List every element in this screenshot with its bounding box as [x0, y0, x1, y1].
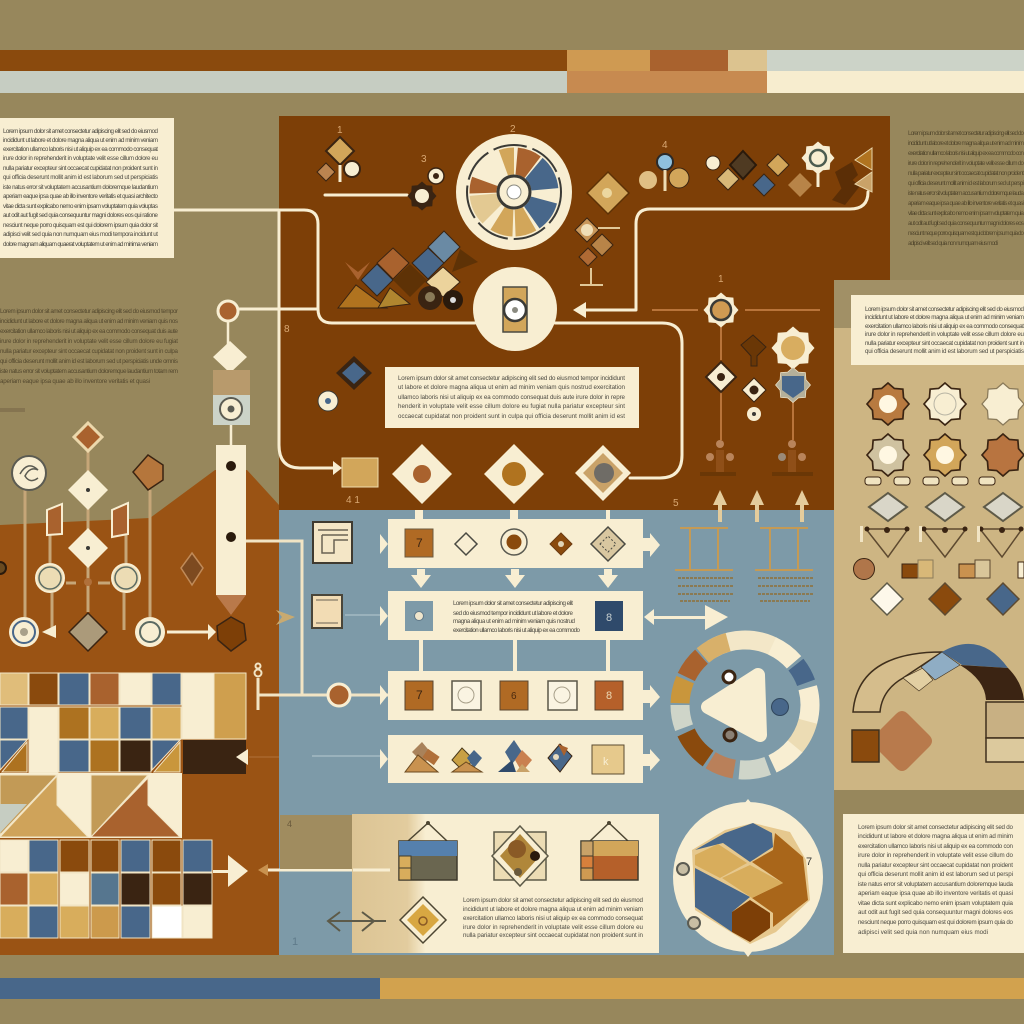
icon group: row of tiles: [706, 151, 812, 197]
icon: corner triangles: [832, 148, 872, 205]
text block: top right: qui officia deserunt mollit anim id est laborum sed ut perspi: [908, 180, 1024, 187]
icon: centre circle card: [473, 267, 557, 351]
icon: gold star: [772, 326, 814, 370]
chart: hexagon emblem: [673, 799, 823, 957]
row two: [388, 591, 643, 640]
text block: lower centre: [463, 897, 644, 939]
chart: arch diagram: [852, 644, 1024, 771]
text block: top right: Lorem ipsum dolor sit amet consectetur adipiscing elit sed do: [908, 130, 1024, 137]
text block: lower centre: exercitation ullamco laboris nisi ut aliquip ex ea commodo consequat: [463, 915, 643, 922]
text block: top left: Lorem ipsum dolor sit amet consectetur adipiscing elit sed do eiusmod: [3, 128, 159, 135]
icon: rust node: [328, 684, 350, 706]
icon: gold box: [342, 458, 378, 487]
text block: left middle: nulla pariatur excepteur sint occaecat cupidatat non proident sunt in culpa: [0, 348, 179, 355]
panel: tan icon legend: [834, 280, 1024, 790]
icon: gate right: [755, 528, 813, 601]
icon: star node: 1: [718, 274, 724, 285]
small mark: [0, 408, 25, 412]
icon grid: stars and diamonds: [854, 383, 1024, 615]
row four: k: [603, 756, 609, 768]
number label: 4 1: [346, 495, 360, 506]
text block: top left: exercitation ullamco laboris nisi ut aliquip ex ea commodo consequat: [3, 146, 158, 153]
text block: lower centre: nulla pariatur excepteur sint occaecat cupidatat non proident sunt in: [463, 932, 644, 939]
chart: segmented ring: [653, 613, 837, 797]
icon: gold diamond: [587, 172, 629, 214]
text block: lower right: aperiam eaque ipsa quae ab illo inventore veritatis et quasi: [858, 890, 1013, 897]
tile grid: lower: [0, 840, 212, 938]
arrow: tan marker: [276, 610, 295, 625]
text block: lower right: aut odit aut fugit sed quia consequuntur magni dolores eos: [858, 909, 1013, 916]
text block: top right: exercitation ullamco laboris nisi ut aliquip ex ea commodo con: [908, 150, 1024, 157]
chart: segmented wheel: 2: [510, 124, 516, 135]
row one: 7: [416, 536, 423, 550]
icon: gold diamond: [400, 897, 446, 943]
text block: lower right: qui officia deserunt mollit anim id est laborum sed ut perspi: [858, 871, 1013, 878]
arrow: out of lower grid: [213, 855, 248, 887]
icon group: diamond tiles and triangles: [338, 231, 478, 310]
arrow: into dark tile: [236, 749, 279, 765]
number label: 1: [292, 936, 298, 948]
arrows: up: [713, 490, 809, 522]
icon: blue star: [776, 368, 810, 402]
icon group: step 4: 4: [662, 140, 668, 151]
text block: right panel: incididunt ut labore et dolore magna aliqua ut enim ad minim veniam: [865, 314, 1024, 321]
icon: left note: [312, 595, 342, 628]
text block: right panel: irure dolor in reprehenderit in voluptate velit esse cillum dolore eu: [865, 331, 1024, 338]
text block: lower centre: irure dolor in reprehenderit in voluptate velit esse cillum dolore eu: [463, 924, 644, 931]
icon: diamond two: [484, 444, 544, 504]
row two: magna aliqua ut enim ad minim veniam quis nostrud: [453, 618, 576, 625]
arrow: row two right: [644, 605, 728, 630]
text block: center: occaecat cupidatat non proident sunt in culpa qui officia deserunt mollit anim id est: [398, 413, 625, 420]
tile grid: upper: [0, 673, 246, 774]
line: lower block feed: [353, 868, 390, 872]
icon: card orange: [581, 821, 638, 880]
connector lines in brown panel: [174, 192, 868, 478]
icon group: step 3: [408, 154, 444, 210]
arrow: toward lower grid: [258, 864, 352, 876]
number label: 5: [673, 498, 679, 509]
text block: lower right: vitae dicta sunt explicabo nemo enim ipsam voluptatem quia: [858, 900, 1014, 907]
text block: lower centre: incididunt ut labore et dolore magna aliqua ut enim ad minim veniam: [463, 906, 643, 913]
icon group: diamonds column: [706, 335, 766, 421]
icon: star badge: [802, 142, 834, 187]
arrows: row inputs: [380, 534, 388, 769]
rust guide lines: [652, 310, 820, 440]
text block: left middle: incididunt ut labore et dolore magna aliqua ut enim ad minim veniam quis nos: [0, 318, 178, 325]
text block: right panel: [851, 295, 1024, 365]
icon: emblem: [492, 826, 548, 886]
arrow: double headed: [328, 912, 386, 931]
text block: top right: vitae dicta sunt explicabo nemo enim ipsam voluptatem quia: [908, 210, 1024, 217]
tile grid: triangles: [0, 773, 182, 838]
faint row feeders: [312, 615, 380, 756]
arrow: to gold box: [333, 461, 342, 475]
text block: center: ullamco laboris nisi ut aliquip ex ea commodo consequat duis aute irure dolor in repre: [398, 394, 626, 401]
text block: top left: [0, 118, 174, 258]
panel: lower left tan block: [280, 815, 352, 869]
text block: lower right: nulla pariatur excepteur sint occaecat cupidatat non proident: [858, 862, 1013, 869]
number label: 8: [284, 324, 290, 335]
panel: blue process area: [279, 510, 834, 955]
text block: top right: irure dolor in reprehenderit in voluptate velit esse cillum do: [908, 160, 1024, 167]
icon: connector rings: [254, 664, 262, 676]
text block: top right: adipisci velit sed quia non numquam eius modi: [908, 240, 998, 247]
text block: lower centre: Lorem ipsum dolor sit amet consectetur adipiscing elit sed do eiusmod: [463, 897, 644, 904]
flow column: left node chain: [213, 301, 250, 615]
icon: gate left: [675, 528, 733, 601]
arrows: down between rows one and two: [411, 569, 618, 588]
icon: diamond three: [575, 445, 631, 501]
icon group: step 1: [317, 125, 360, 182]
row four: [388, 735, 643, 783]
text block: left middle: irure dolor in reprehenderit in voluptate velit esse cillum dolore eu fugiat: [0, 338, 178, 345]
text block: top right: nesciunt neque porro quisquam est qui dolorem ipsum quia do: [908, 230, 1024, 237]
row two: Lorem ipsum dolor sit amet consectetur adipiscing elit: [453, 600, 573, 607]
panel: left brown area: [0, 470, 279, 955]
text block: center: ut labore et dolore magna aliqua ut enim ad minim veniam quis nostrud exercitation: [398, 384, 626, 391]
text block: top right: nulla pariatur excepteur sint occaecat cupidatat non proident: [908, 170, 1024, 177]
icon group: step 4: [639, 140, 689, 191]
text block: top right: incididunt ut labore et dolore magna aliqua ut enim ad minim: [908, 140, 1024, 147]
text block: left middle: Lorem ipsum dolor sit amet consectetur adipiscing elit sed do eiusmod tempor: [0, 308, 178, 315]
text block: top left: vitae dicta sunt explicabo nemo enim ipsam voluptatem quia voluptas: [3, 203, 158, 210]
text block: lower right: irure dolor in reprehenderit in voluptate velit esse cillum do: [858, 852, 1014, 859]
icon: figure right: [772, 440, 813, 474]
text block: top left: iste natus error sit voluptatem accusantium doloremque laudantium: [3, 184, 158, 191]
icon: card blue: [399, 821, 457, 880]
text block: top left: aut odit aut fugit sed quia consequuntur magni dolores eos qui ratione: [3, 212, 159, 219]
icon group: step 1: 1: [337, 125, 343, 136]
text block: lower right: Lorem ipsum dolor sit amet consectetur adipiscing elit sed do: [858, 824, 1014, 831]
icon group: diamonds cluster: [575, 218, 620, 285]
text block: left middle: aperiam eaque ipsa quae ab illo inventore veritatis et quasi: [0, 378, 150, 385]
chart: hexagon emblem: 7: [806, 856, 812, 868]
connectors between rows: [415, 510, 610, 671]
row three: [388, 671, 643, 720]
panel: lower cream block: [352, 814, 659, 953]
text block: top left: incididunt ut labore et dolore magna aliqua ut enim ad minim veniam: [3, 137, 158, 144]
text block: top left: qui officia deserunt mollit anim id est laborum sed ut perspiciatis: [3, 174, 158, 181]
icon: diamond one: [392, 444, 452, 504]
row two: exercitation ullamco laboris nisi ut aliquip ex ea commodo: [453, 627, 581, 634]
icon: small ring: [318, 391, 338, 411]
text block: left middle: qui officia deserunt mollit anim id est laborum sed ut perspiciatis unde omnis: [0, 358, 178, 365]
text block: lower right: iste natus error sit voluptatem accusantium doloremque lauda: [858, 881, 1014, 888]
text block: top right: [908, 130, 1024, 247]
chart: segmented wheel: [456, 124, 572, 250]
text block: top left: aperiam eaque ipsa quae ab illo inventore veritatis et quasi architecto: [3, 193, 159, 200]
text block: lower right: exercitation ullamco laboris nisi ut aliquip ex ea commodo con: [858, 843, 1014, 850]
text block: right panel: Lorem ipsum dolor sit amet consectetur adipiscing elit sed do eiusmod: [865, 306, 1024, 313]
text block: lower right: [843, 814, 1024, 953]
text block: left middle: [0, 308, 179, 385]
text block: lower right: incididunt ut labore et dolore magna aliqua ut enim ad minim: [858, 833, 1013, 840]
row two: sed do eiusmod tempor incididunt ut labore et dolore: [453, 610, 574, 617]
arrow: to process centre: [573, 302, 586, 318]
text block: lower right: adipisci velit sed quia non numquam eius modi: [858, 929, 988, 936]
text block: top left: dolore magnam aliquam quaerat voluptatem ut enim ad minima veniam: [3, 241, 158, 248]
text block: center: henderit in voluptate velit esse cillum dolore eu fugiat nulla pariatur excepteur sint: [398, 403, 625, 410]
row three: 8: [606, 690, 612, 702]
icon: star node: [704, 274, 738, 328]
text block: center: [385, 367, 639, 428]
icon: figure left: [700, 440, 736, 474]
text block: lower right: nesciunt neque porro quisquam est qui dolorem ipsum quia do: [858, 919, 1014, 926]
text block: right panel: exercitation ullamco laboris nisi ut aliquip ex ea commodo consequat: [865, 323, 1024, 330]
icon group: step 3: 3: [421, 154, 427, 165]
text block: right panel: nulla pariatur excepteur sint occaecat cupidatat non proident sunt in: [865, 340, 1024, 347]
text block: top right: iste natus error sit voluptatem accusantium doloremque lauda: [908, 190, 1024, 197]
row two: 8: [606, 612, 612, 624]
panel: dark brown process area: [279, 116, 890, 510]
arrows: row outputs: [643, 533, 660, 771]
icon: blue diamond: [336, 356, 372, 390]
text block: top left: adipisci velit sed quia non numquam eius modi tempora incidunt ut: [3, 231, 158, 238]
icon: left document: [313, 522, 352, 563]
flow tree: left diagram: [0, 423, 246, 651]
bottom colour stripe: [0, 978, 1024, 999]
connector: column to blue panel: [246, 541, 388, 710]
text block: left middle: exercitation ullamco laboris nisi ut aliquip ex ea commodo consequat duis aute: [0, 328, 179, 335]
text block: left middle: iste natus error sit voluptatem accusantium doloremque laudantium totam rem: [0, 368, 178, 375]
row three: 6: [511, 691, 517, 702]
row three: 7: [416, 688, 423, 702]
row one: [388, 519, 643, 568]
text block: top left: nesciunt neque porro quisquam est qui dolorem ipsum quia dolor sit: [3, 222, 158, 229]
text block: top right: aperiam eaque ipsa quae ab illo inventore veritatis et quasi: [908, 200, 1024, 207]
number label: 4: [287, 819, 292, 829]
top colour stripes: [0, 50, 1024, 93]
text block: top left: irure dolor in reprehenderit in voluptate velit esse cillum dolore eu: [3, 155, 159, 162]
text block: center: Lorem ipsum dolor sit amet consectetur adipiscing elit sed do eiusmod tempor incididunt: [398, 375, 625, 382]
text block: top left: nulla pariatur excepteur sint occaecat cupidatat non proident sunt in: [3, 165, 159, 172]
text block: top right: aut odit aut fugit sed quia consequuntur magni dolores eos: [908, 220, 1024, 227]
text block: right panel: qui officia deserunt mollit anim id est laborum sed ut perspiciatis: [865, 348, 1024, 355]
